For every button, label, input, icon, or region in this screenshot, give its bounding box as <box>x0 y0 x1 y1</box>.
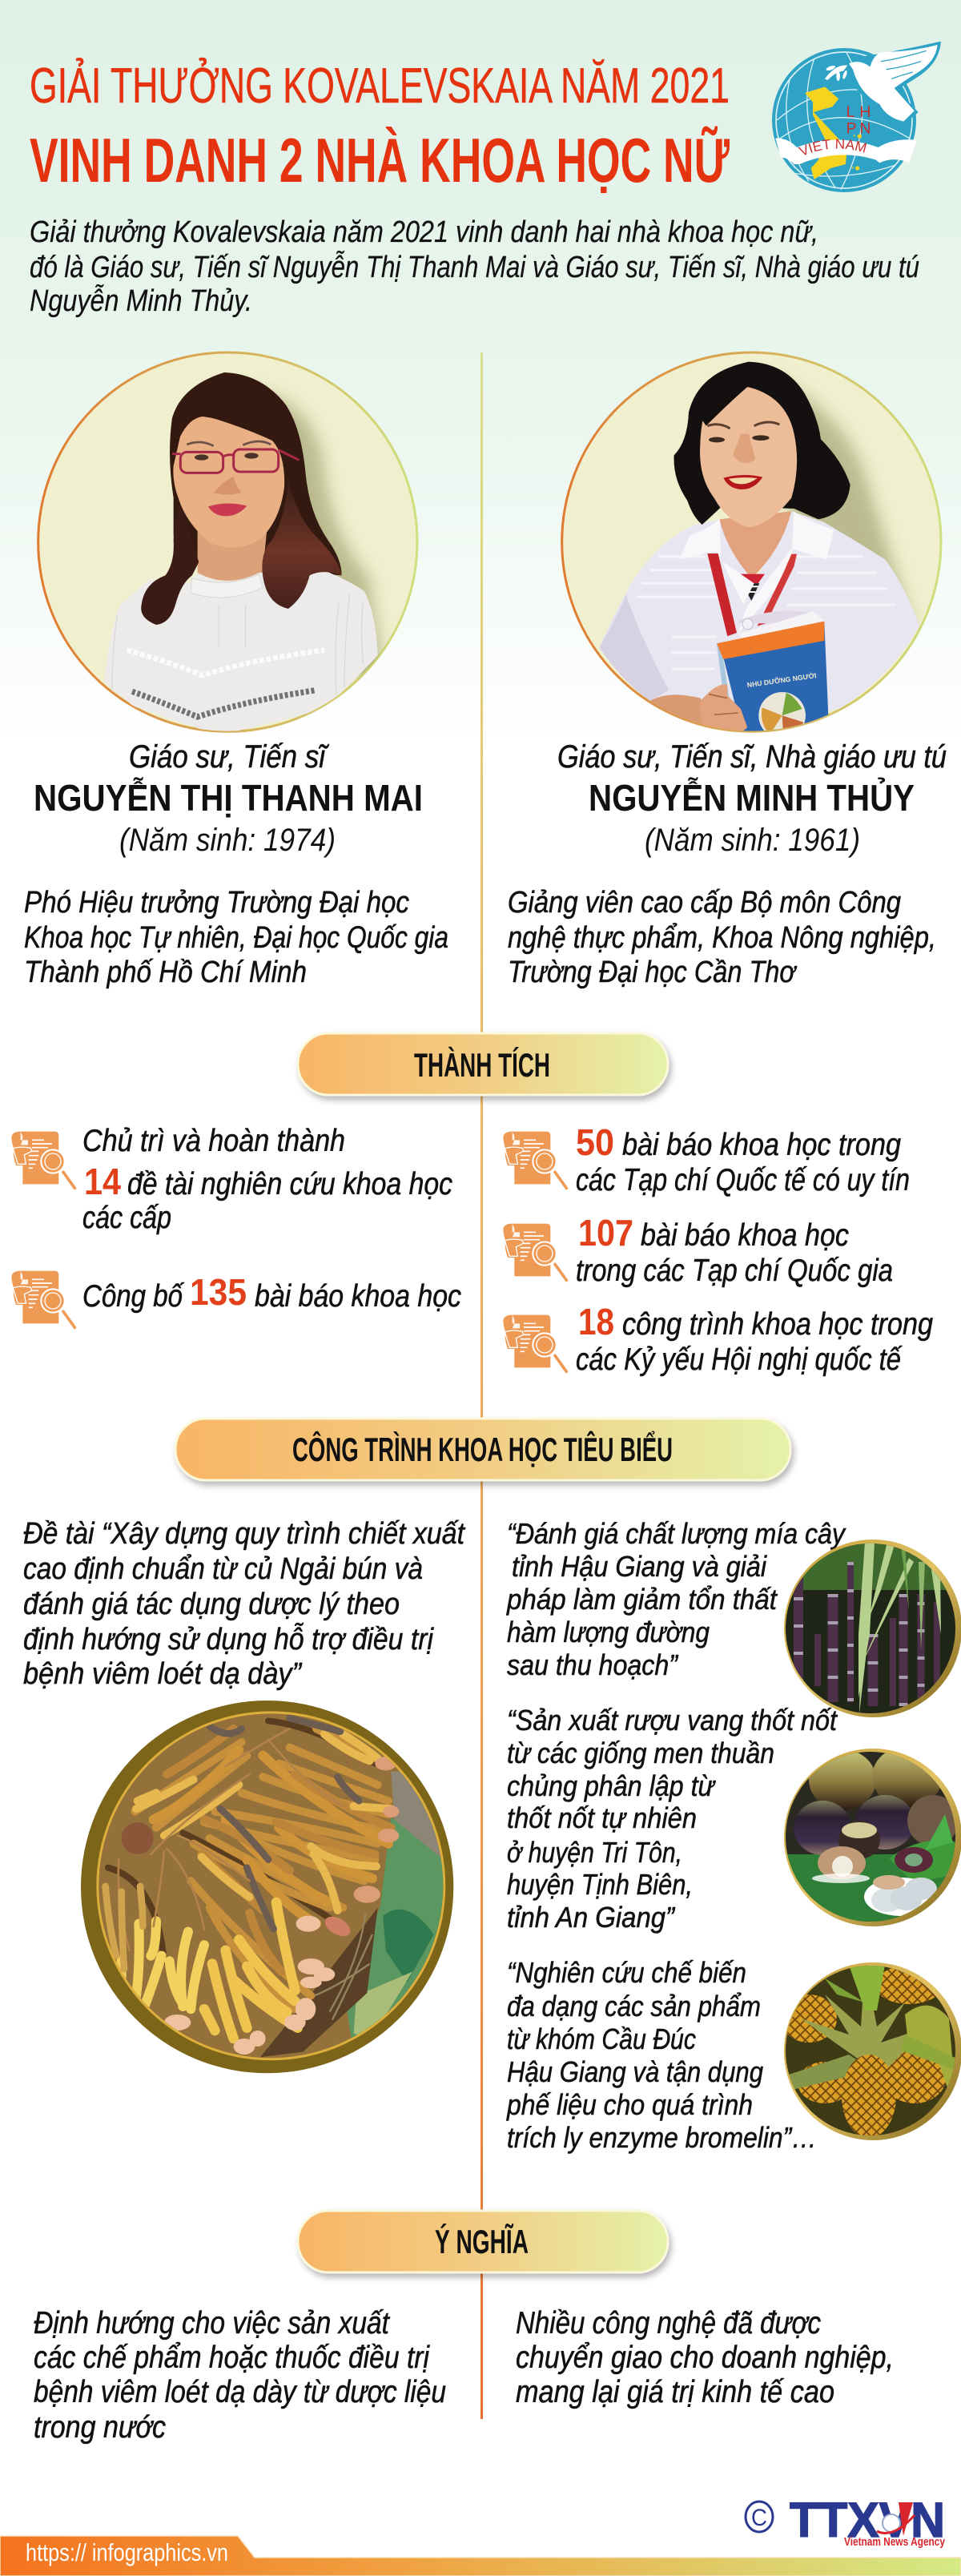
icon: TTXVN logo: C <box>751 2505 767 2531</box>
text: achievement 107 papers: bài báo khoa học <box>641 1218 849 1253</box>
icon: document with magnifier <box>11 1132 74 1188</box>
text: scientist 1 name <box>34 739 423 858</box>
text: significance right <box>516 2306 894 2409</box>
panel: achievements scientist 1 <box>11 1124 461 1327</box>
text: work 2 of scientist 2: chủng phân lập từ <box>507 1769 716 1802</box>
text: achievement 14 topics: đề tài nghiên cứu khoa học <box>127 1167 452 1201</box>
icon: TTXVN logo: TTXVN <box>790 2493 945 2547</box>
photo: pineapples <box>781 1962 961 2140</box>
background <box>0 0 961 745</box>
text: work 3 of scientist 2: từ khóm Cầu Đúc <box>507 2023 696 2055</box>
hair front curls <box>141 533 199 625</box>
icon: Vietnam Women's Union logo <box>772 42 941 192</box>
text: significance left: Định hướng cho việc sản xuất <box>34 2306 391 2341</box>
icon: Vietnam Women's Union logo: LH <box>846 104 871 121</box>
text: achievement 50 papers: bài báo khoa học trong <box>622 1128 901 1162</box>
hair <box>674 362 850 525</box>
text: significance left: bệnh viêm loét dạ dày từ dược liệu <box>34 2375 446 2409</box>
text: scientist 2 name: NGUYỄN MINH THỦY <box>589 777 915 819</box>
text: significance left: trong nước <box>34 2410 166 2445</box>
heading: significance <box>298 2211 668 2272</box>
text: significance right: chuyển giao cho doanh nghiệp, <box>516 2341 894 2375</box>
intro text: Nguyễn Minh Thủy. <box>30 283 252 318</box>
text: achievement 107 papers: 107 <box>578 1212 633 1254</box>
hair back <box>170 372 342 575</box>
text: work 1 of scientist 2: tỉnh Hậu Giang và giải <box>512 1550 767 1583</box>
title <box>30 58 730 195</box>
arm and hand <box>650 694 706 726</box>
text: achievement 107 papers <box>576 1212 893 1288</box>
text: work 2 of scientist 2: huyện Tịnh Biên, <box>507 1868 693 1901</box>
text: achievement 14 topics: Chủ trì và hoàn thành <box>82 1124 345 1158</box>
glasses <box>172 449 299 473</box>
text: work 3 of scientist 2 <box>506 1956 817 2154</box>
text: work of scientist 1: cao định chuẩn từ củ Ngải bún và <box>23 1552 423 1586</box>
text: scientist 1 position: Thành phố Hồ Chí Minh <box>24 956 307 989</box>
text: work 3 of scientist 2: phế liệu cho quá trình <box>506 2088 753 2121</box>
collar <box>679 519 754 605</box>
intro text: Giải thưởng Kovalevskaia năm 2021 vinh danh hai nhà khoa học nữ, <box>30 215 818 249</box>
photo: palmyra fruit <box>784 1746 961 1926</box>
text: scientist 1 name: Giáo sư, Tiến sĩ <box>129 739 329 775</box>
text: achievement 18 works <box>576 1301 933 1377</box>
icon: document with magnifier <box>503 1132 566 1188</box>
text: work 3 of scientist 2: trích ly enzyme bromelin”… <box>507 2121 817 2154</box>
text: achievement 18 works: các Kỷ yếu Hội nghị quốc tế <box>576 1342 903 1377</box>
text: work 3 of scientist 2: “Nghiên cứu chế biến <box>507 1956 746 1989</box>
icon: document with magnifier <box>503 1315 566 1371</box>
text: achievement 135 papers: bài báo khoa học <box>255 1279 461 1314</box>
lanyard <box>707 553 737 636</box>
heading: achievements: THÀNH TÍCH <box>414 1046 550 1084</box>
text: work 3 of scientist 2: đa dạng các sản phẩm <box>507 1990 761 2023</box>
neck <box>197 531 267 581</box>
text: work 3 of scientist 2: Hậu Giang và tận dụng <box>507 2055 763 2088</box>
text: scientist 2 name: (Năm sinh: 1961) <box>645 823 860 858</box>
text: work 1 of scientist 2: pháp làm giảm tổn thất <box>506 1583 778 1616</box>
shirt <box>599 511 919 727</box>
text: work of scientist 1: đánh giá tác dụng dược lý theo <box>23 1588 400 1621</box>
text: scientist 1 name: (Năm sinh: 1974) <box>119 823 336 858</box>
text: significance right: mang lại giá trị kinh tế cao <box>516 2375 834 2409</box>
text: achievement 50 papers <box>576 1121 910 1197</box>
face <box>173 415 284 548</box>
text: scientist 2 position <box>508 886 936 989</box>
text: scientist 1 position: Phó Hiệu trưởng Trường Đại học <box>24 886 409 920</box>
book <box>738 611 825 639</box>
text: work of scientist 1: bệnh viêm loét dạ dày” <box>23 1657 303 1691</box>
blouse <box>104 570 378 735</box>
icon: document with magnifier <box>11 1271 74 1327</box>
text: significance right: Nhiều công nghệ đã được <box>516 2306 821 2341</box>
text: achievement 50 papers: 50 <box>576 1121 614 1163</box>
panel: scientist 1 portrait <box>38 352 417 735</box>
intro text <box>30 215 919 318</box>
text: work of scientist 1 <box>23 1517 465 1691</box>
text: achievement 135 papers: 135 <box>190 1271 247 1313</box>
text: achievement 18 works: 18 <box>578 1301 614 1342</box>
text: achievement 135 papers: Công bố <box>82 1279 185 1314</box>
text: achievement 107 papers: trong các Tạp chí Quốc gia <box>576 1254 893 1288</box>
text: work 2 of scientist 2: tỉnh An Giang” <box>507 1901 676 1934</box>
icon: Vietnam Women's Union logo: VIET NAM <box>798 139 867 155</box>
text: work 1 of scientist 2: “Đánh giá chất lượng mía cây <box>507 1517 846 1550</box>
panel: scientist 2 portrait <box>562 352 941 739</box>
text: work 2 of scientist 2: ở huyện Tri Tôn, <box>507 1836 682 1869</box>
heading: significance: Ý NGHĨA <box>435 2223 529 2260</box>
footer bar: https:// infographics.vn <box>26 2538 228 2566</box>
text: work 1 of scientist 2 <box>506 1517 846 1681</box>
photo: Ngai bun roots <box>81 1701 453 2073</box>
text: significance left: các chế phẩm hoặc thuốc điều trị <box>34 2341 430 2375</box>
heading: notable scientific works: CÔNG TRÌNH KHOA HỌC TIÊU BIỂU <box>292 1430 673 1468</box>
panel: scientist 2 portrait: NHU DƯỠNG NGƯỜI <box>746 670 817 689</box>
text: scientist 1 position <box>24 886 448 989</box>
footer bar <box>0 2536 961 2576</box>
text: significance left <box>34 2306 446 2445</box>
text: scientist 2 position: Giảng viên cao cấp Bộ môn Công <box>508 886 901 920</box>
text: achievement 14 topics <box>82 1124 452 1235</box>
text: scientist 2 name <box>557 739 947 858</box>
text: work 2 of scientist 2: từ các giống men thuần <box>507 1737 774 1769</box>
text: work of scientist 1: định hướng sử dụng hỗ trợ điều trị <box>23 1621 434 1656</box>
text: scientist 2 position: Trường Đại học Cần Thơ <box>508 956 798 989</box>
icon: document with magnifier <box>503 1224 566 1280</box>
icon: Vietnam Women's Union logo: PN <box>846 121 871 138</box>
text: work of scientist 1: Đề tài “Xây dựng quy trình chiết xuất <box>23 1517 465 1551</box>
heading: achievements <box>298 1033 668 1095</box>
text: work 1 of scientist 2: hàm lượng đường <box>507 1616 710 1648</box>
text: work 2 of scientist 2: thốt nốt tự nhiên <box>507 1801 697 1834</box>
text: scientist 1 position: Khoa học Tự nhiên, Đại học Quốc gia <box>24 921 448 955</box>
text: work 2 of scientist 2 <box>507 1704 838 1934</box>
text: achievement 135 papers <box>82 1271 461 1314</box>
text: work 1 of scientist 2: sau thu hoạch” <box>507 1648 679 1681</box>
text: work 2 of scientist 2: “Sản xuất rượu vang thốt nốt <box>507 1704 838 1737</box>
face <box>700 387 797 527</box>
heading: notable scientific works <box>175 1419 790 1480</box>
text: scientist 1 name: NGUYỄN THỊ THANH MAI <box>34 777 423 819</box>
text: achievement 14 topics: 14 <box>84 1161 121 1202</box>
panel: achievements scientist 2 <box>503 1121 933 1377</box>
photo: sugarcane <box>784 1540 961 1717</box>
text: achievement 14 topics: các cấp <box>82 1201 171 1235</box>
center divider <box>480 352 483 2419</box>
